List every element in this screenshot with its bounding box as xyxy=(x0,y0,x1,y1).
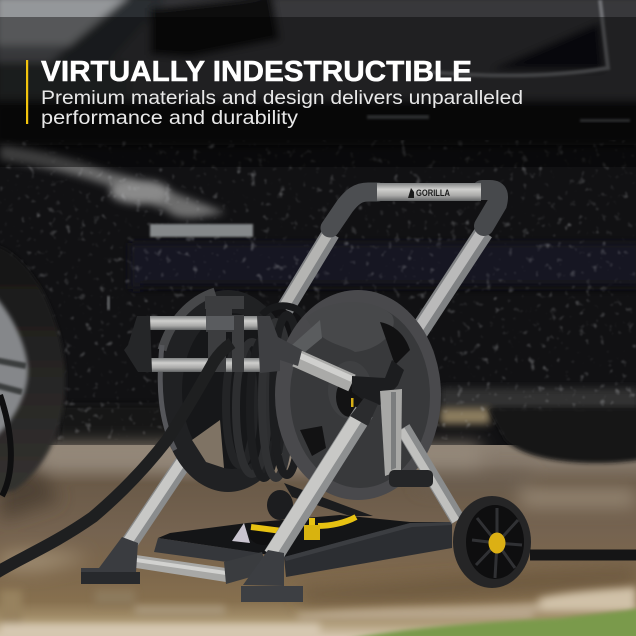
front beam xyxy=(284,522,452,577)
right foot xyxy=(241,550,303,602)
right handle tube xyxy=(393,231,484,368)
door handles xyxy=(367,115,630,122)
spray texture xyxy=(0,140,636,440)
hose reel: back disc xyxy=(159,290,297,492)
heading: VIRTUALLY INDESTRUCTIBLE xyxy=(41,56,472,88)
logo: GORILLA xyxy=(416,188,450,198)
T joint and diagonal tube xyxy=(257,316,352,383)
accent bar xyxy=(26,60,28,124)
dark caption band xyxy=(0,17,636,167)
hose coil xyxy=(226,306,305,478)
top handle xyxy=(330,183,498,228)
wheel hub xyxy=(488,532,506,554)
grass xyxy=(345,608,636,636)
silver roller xyxy=(136,555,226,582)
rear right leg xyxy=(401,428,458,521)
truck front tire and wheel xyxy=(0,245,65,496)
bar clamp xyxy=(205,296,244,372)
right grip xyxy=(482,190,498,226)
left handle tube xyxy=(283,232,331,309)
base tray xyxy=(136,515,452,584)
left foot xyxy=(81,537,140,584)
logo icon xyxy=(408,188,414,198)
disc opening xyxy=(192,420,224,468)
rear truck tire xyxy=(488,408,636,463)
subheading: Premium materials and design delivers unparalleled xyxy=(41,88,523,109)
truck badge xyxy=(150,224,253,237)
back wheel and strut under reel xyxy=(267,483,373,520)
lower bar xyxy=(142,358,260,372)
window trim xyxy=(430,0,608,75)
hub connector xyxy=(350,360,404,426)
truck door band xyxy=(60,243,636,445)
yellow sprinkler and brush on the tray xyxy=(232,517,356,545)
left rear leg xyxy=(128,426,207,542)
ground: wet concrete xyxy=(0,445,636,636)
water spray xyxy=(0,145,225,218)
right hose xyxy=(530,550,636,560)
front leg xyxy=(270,411,364,556)
subheading xyxy=(41,88,523,129)
left grip xyxy=(330,192,378,228)
subheading: performance and durability xyxy=(41,108,299,129)
handle bar xyxy=(377,183,481,201)
reel hub xyxy=(328,361,372,419)
wheel xyxy=(453,496,531,588)
truck cab and windows xyxy=(0,0,636,145)
reel side bars and clip xyxy=(124,296,260,372)
crank handle xyxy=(380,389,433,487)
black hose left xyxy=(0,343,232,573)
handle tubes behind reel xyxy=(283,231,484,368)
hose reel: front disc xyxy=(275,290,441,500)
upper bar xyxy=(140,316,258,330)
disc openings xyxy=(380,322,410,365)
